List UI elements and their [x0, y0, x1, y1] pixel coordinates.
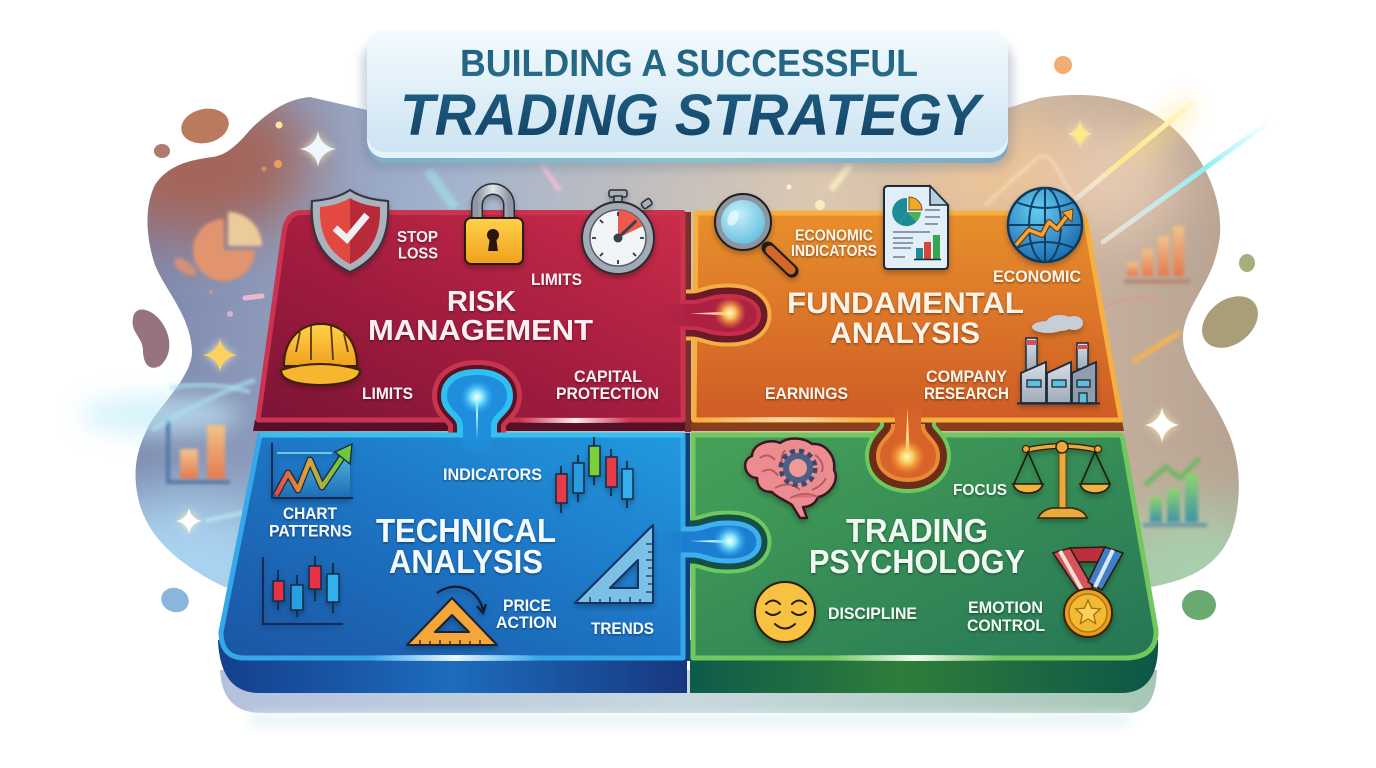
trading psychology labels: CONTROL	[967, 617, 1045, 635]
right tab neck blend	[656, 532, 696, 552]
technical analysis labels	[269, 465, 654, 638]
card light lip	[367, 40, 1008, 158]
risk management labels: MANAGEMENT	[368, 315, 593, 347]
technical analysis labels: TECHNICAL	[376, 512, 556, 549]
tab beams	[476, 400, 730, 544]
tab beam	[690, 312, 730, 316]
icon: orange protractor triangle	[407, 587, 497, 645]
blue upward tab halo into red	[444, 372, 510, 436]
trading psychology labels	[809, 482, 1045, 635]
technical analysis labels: ANALYSIS	[389, 543, 543, 580]
icon: calm smiley	[755, 582, 815, 642]
risk management labels: LIMITS	[531, 271, 582, 289]
red panel face	[258, 212, 683, 420]
trading psychology labels: DISCIPLINE	[828, 605, 917, 623]
bottom rim highlight	[830, 655, 1000, 661]
board drop shadow	[220, 670, 1157, 713]
fundamental analysis labels: ANALYSIS	[830, 317, 980, 350]
icon: rising line chart	[272, 443, 353, 498]
tab glows	[460, 380, 747, 558]
tab glow	[889, 439, 925, 475]
blue tab halo into green	[686, 523, 759, 561]
red tab halo into orange	[686, 296, 759, 334]
blue panel side wall	[218, 640, 687, 693]
blurred pie chart (background)	[171, 212, 262, 281]
icon: hard hat	[281, 324, 360, 385]
icon: stopwatch	[582, 190, 654, 274]
central vertical gutter	[685, 212, 691, 432]
trading psychology labels: PSYCHOLOGY	[809, 543, 1025, 580]
orange tab neck blend	[895, 400, 921, 432]
blue right tab	[682, 523, 759, 561]
icon: large set square	[575, 525, 653, 603]
blurred growth chart (background)	[1143, 458, 1207, 527]
cyan haze left of the blob	[80, 395, 240, 435]
blurred bar chart, right (background)	[1124, 226, 1190, 284]
small floating blobs	[133, 56, 1268, 620]
fundamental analysis labels: ECONOMIC	[795, 228, 873, 244]
risk management labels: CAPITAL	[574, 368, 642, 386]
icon: shield with check	[312, 190, 388, 272]
technical analysis labels: PRICE	[503, 596, 551, 615]
orange panel lower lip	[691, 420, 1124, 431]
risk management labels: LIMITS	[362, 385, 413, 403]
red panel lower lip	[253, 420, 691, 431]
tab beam	[906, 408, 910, 450]
icon: magnifying glass	[715, 194, 792, 271]
orange panel face	[694, 213, 1121, 420]
icon: candlestick chart lower left	[263, 556, 343, 624]
risk management labels: LOSS	[398, 246, 438, 262]
background color blob	[136, 94, 1239, 587]
risk management labels	[362, 229, 659, 403]
red tab dark outline	[686, 296, 759, 334]
trading psychology labels: FOCUS	[953, 482, 1007, 499]
card shadow	[362, 42, 1013, 169]
title line one: BUILDING A SUCCESSFUL	[460, 43, 918, 85]
fundamental analysis labels: INDICATORS	[791, 243, 877, 260]
fundamental analysis labels: RESEARCH	[924, 385, 1009, 403]
puzzle tab halo into green	[878, 420, 938, 480]
technical analysis labels: INDICATORS	[443, 465, 542, 484]
trading psychology labels: TRADING	[846, 512, 988, 549]
icon: padlock	[465, 189, 523, 264]
blue tab dark outline	[686, 523, 759, 561]
puzzle tab dark outline	[878, 420, 938, 480]
blue panel face	[221, 435, 683, 658]
pale glow below the board	[250, 713, 1130, 727]
icon: brain and gear	[745, 439, 836, 518]
technical analysis labels: PATTERNS	[269, 522, 352, 540]
icon: report document	[884, 186, 948, 269]
fundamental analysis labels: ECONOMIC	[993, 268, 1081, 286]
red tab neck blend	[656, 304, 696, 326]
panel: risk management	[253, 189, 759, 432]
risk management labels: STOP	[397, 229, 438, 246]
tab glow	[714, 297, 746, 329]
bottom rim highlight	[370, 655, 540, 661]
fundamental analysis labels	[765, 228, 1081, 403]
title card	[362, 30, 1013, 169]
icon: globe with rising arrow	[1008, 188, 1082, 262]
trading psychology labels: EMOTION	[968, 599, 1043, 617]
risk management labels: PROTECTION	[556, 385, 659, 403]
icon: medal	[1053, 547, 1123, 637]
card face	[367, 30, 1008, 152]
icon: balance scale	[1013, 441, 1110, 518]
light streaks	[152, 103, 1273, 521]
bottom rim highlight	[700, 417, 870, 422]
title line two: TRADING STRATEGY	[400, 83, 985, 148]
blue upward tab dark outline	[444, 372, 510, 436]
bottom rim highlight	[520, 418, 630, 423]
icon: factory with smoke	[1017, 315, 1100, 404]
orange puzzle tab	[878, 424, 938, 480]
risk management labels: RISK	[447, 286, 516, 318]
technical analysis labels: CHART	[283, 505, 337, 523]
icon: candlesticks upper right	[556, 437, 633, 513]
up tab neck blend	[463, 426, 491, 456]
red puzzle tab	[682, 296, 759, 334]
fundamental analysis labels: COMPANY	[926, 368, 1007, 386]
technical analysis labels: ACTION	[496, 613, 557, 632]
bright top rim	[260, 432, 683, 438]
panel: trading psychology	[690, 435, 1158, 693]
blue upward tab	[444, 372, 510, 434]
blurred bar chart, left (background)	[168, 420, 230, 482]
green panel side wall	[690, 640, 1158, 693]
gutter below the tab	[685, 433, 690, 661]
panel: technical analysis	[218, 372, 759, 693]
card base lip	[368, 50, 1008, 163]
green panel face	[693, 435, 1156, 658]
fundamental analysis labels: FUNDAMENTAL	[787, 287, 1024, 320]
technical analysis labels: TRENDS	[591, 620, 654, 638]
panel: fundamental analysis	[691, 186, 1124, 480]
sparkle stars	[176, 120, 1179, 534]
fundamental analysis labels: EARNINGS	[765, 385, 848, 403]
